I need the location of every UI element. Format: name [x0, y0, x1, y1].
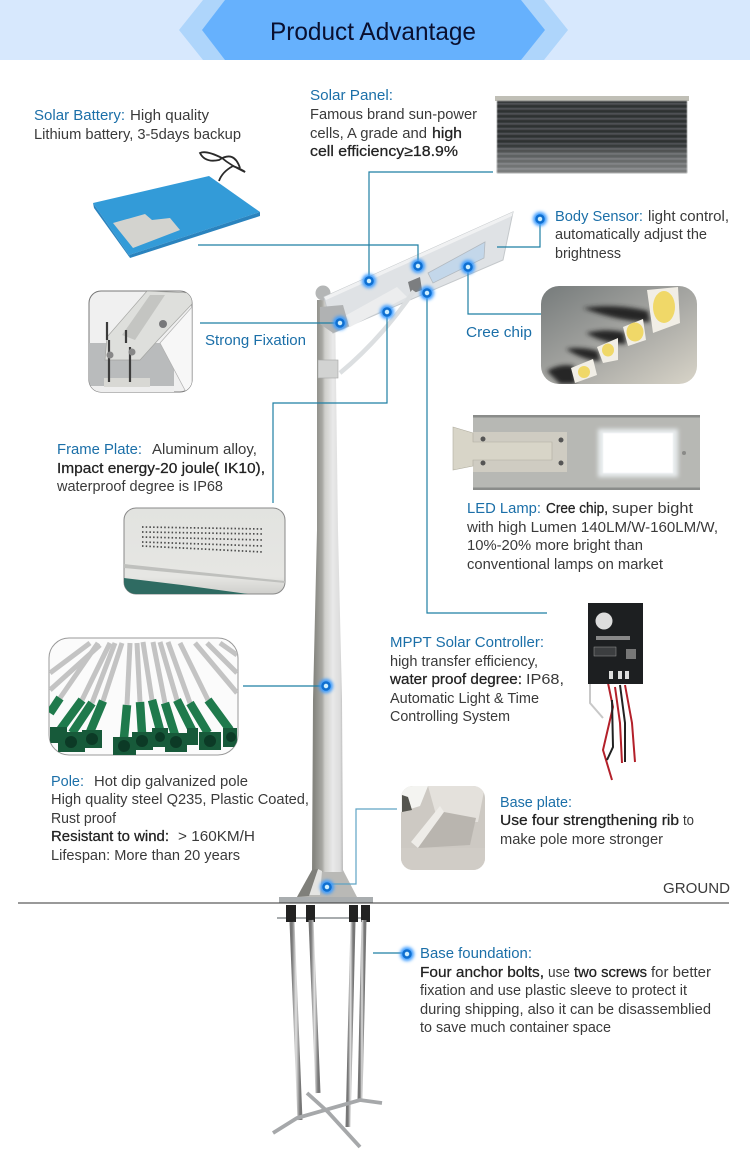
text: frame plate: waterproof degree is IP68 — [56, 479, 223, 495]
text: pole: > 160KM/H — [178, 829, 255, 845]
text: body sensor — [555, 208, 729, 262]
lamp head with solar panel — [320, 212, 513, 373]
text: led lamp — [466, 500, 718, 573]
label: cree chip: Cree chip — [466, 324, 532, 341]
text: base plate — [500, 794, 694, 848]
header banner — [0, 0, 750, 60]
ground line — [18, 902, 729, 904]
text: pole: Lifespan: More than 20 years — [51, 848, 240, 864]
text: base plate: Use four strengthening rib — [500, 813, 679, 829]
photo: battery — [93, 152, 260, 258]
text: base plate: make pole more stronger — [500, 832, 663, 848]
text: base foundation: Four anchor bolts, — [420, 965, 544, 981]
text: solar panel: Solar Panel: — [310, 87, 393, 104]
text: base foundation: during shipping, also it can be disassemblied — [420, 1002, 711, 1018]
text: body sensor: Body Sensor: — [555, 208, 643, 225]
text: base foundation — [420, 945, 711, 1036]
text: led lamp: Cree chip, — [546, 501, 608, 517]
text: mppt solar controller: high transfer efficiency, — [390, 654, 538, 670]
connector lines — [198, 172, 547, 953]
text: base foundation: to save much container space — [420, 1020, 611, 1036]
photo: solar panel — [495, 96, 689, 173]
photo: frame plate — [124, 508, 285, 594]
text: solar battery: Solar Battery: — [34, 107, 125, 124]
text: led lamp: super bight — [612, 501, 693, 517]
text: led lamp: 10%-20% more bright than — [467, 538, 643, 554]
street lamp pole — [279, 286, 373, 903]
foundation anchor bolts — [273, 905, 382, 1147]
text: base plate: Base plate: — [500, 794, 572, 811]
text: base foundation: fixation and use plastic sleeve to protect it — [420, 983, 687, 999]
text: base foundation: Base foundation: — [420, 945, 532, 962]
text: base foundation: for better — [651, 965, 711, 981]
label: strong fixation: Strong Fixation — [205, 332, 306, 349]
text: body sensor: automatically adjust the — [555, 227, 707, 243]
text: base foundation: two screws — [574, 965, 647, 981]
text: base foundation: use — [548, 965, 570, 981]
text: solar battery — [34, 107, 241, 143]
text: solar panel: cells, A grade and — [310, 126, 427, 142]
photo: galvanized poles — [49, 638, 238, 755]
photo: cree chips — [541, 286, 697, 384]
text: led lamp: LED Lamp: — [467, 500, 541, 517]
text: body sensor: brightness — [555, 246, 621, 262]
text: mppt solar controller: MPPT Solar Controller: — [390, 634, 544, 651]
text: pole: High quality steel Q235, Plastic Coated, — [51, 792, 309, 808]
text: solar panel — [310, 87, 477, 160]
text: pole: Pole: — [51, 773, 84, 790]
text: solar battery: High quality — [130, 108, 210, 124]
text: pole: Rust proof — [51, 811, 117, 827]
text: base plate: to — [683, 813, 694, 829]
text: pole: Hot dip galvanized pole — [94, 774, 248, 790]
text: body sensor: light control, — [648, 209, 729, 225]
text: solar panel: high — [432, 126, 462, 142]
photo: led lamp — [453, 415, 700, 490]
marker dots — [319, 212, 547, 961]
text: mppt solar controller: water proof degree: — [389, 672, 522, 688]
text: pole — [51, 773, 309, 864]
text: led lamp: conventional lamps on market — [467, 557, 663, 573]
text: pole: Resistant to wind: — [51, 829, 169, 845]
text: mppt solar controller — [389, 634, 564, 725]
text: frame plate — [56, 441, 265, 495]
photo: base plate — [401, 786, 485, 870]
label: ground: GROUND — [663, 881, 730, 897]
text: solar panel: cell efficiency≥18.9% — [310, 144, 458, 160]
text: solar panel: Famous brand sun-power — [310, 107, 477, 123]
text: frame plate: Aluminum alloy, — [152, 442, 257, 458]
photo: mppt controller — [588, 603, 643, 780]
text: mppt solar controller: IP68, — [526, 672, 564, 688]
text: frame plate: Frame Plate: — [57, 441, 142, 458]
text: frame plate: Impact energy-20 joule( IK10), — [57, 461, 265, 477]
photo: strong fixation — [89, 291, 192, 392]
title: Product Advantage — [270, 18, 476, 46]
text: mppt solar controller: Automatic Light & Time — [390, 691, 539, 707]
text: mppt solar controller: Controlling System — [390, 709, 510, 725]
text: solar battery: Lithium battery, 3-5days backup — [34, 127, 241, 143]
text: led lamp: with high Lumen 140LM/W-160LM/W, — [466, 520, 718, 536]
